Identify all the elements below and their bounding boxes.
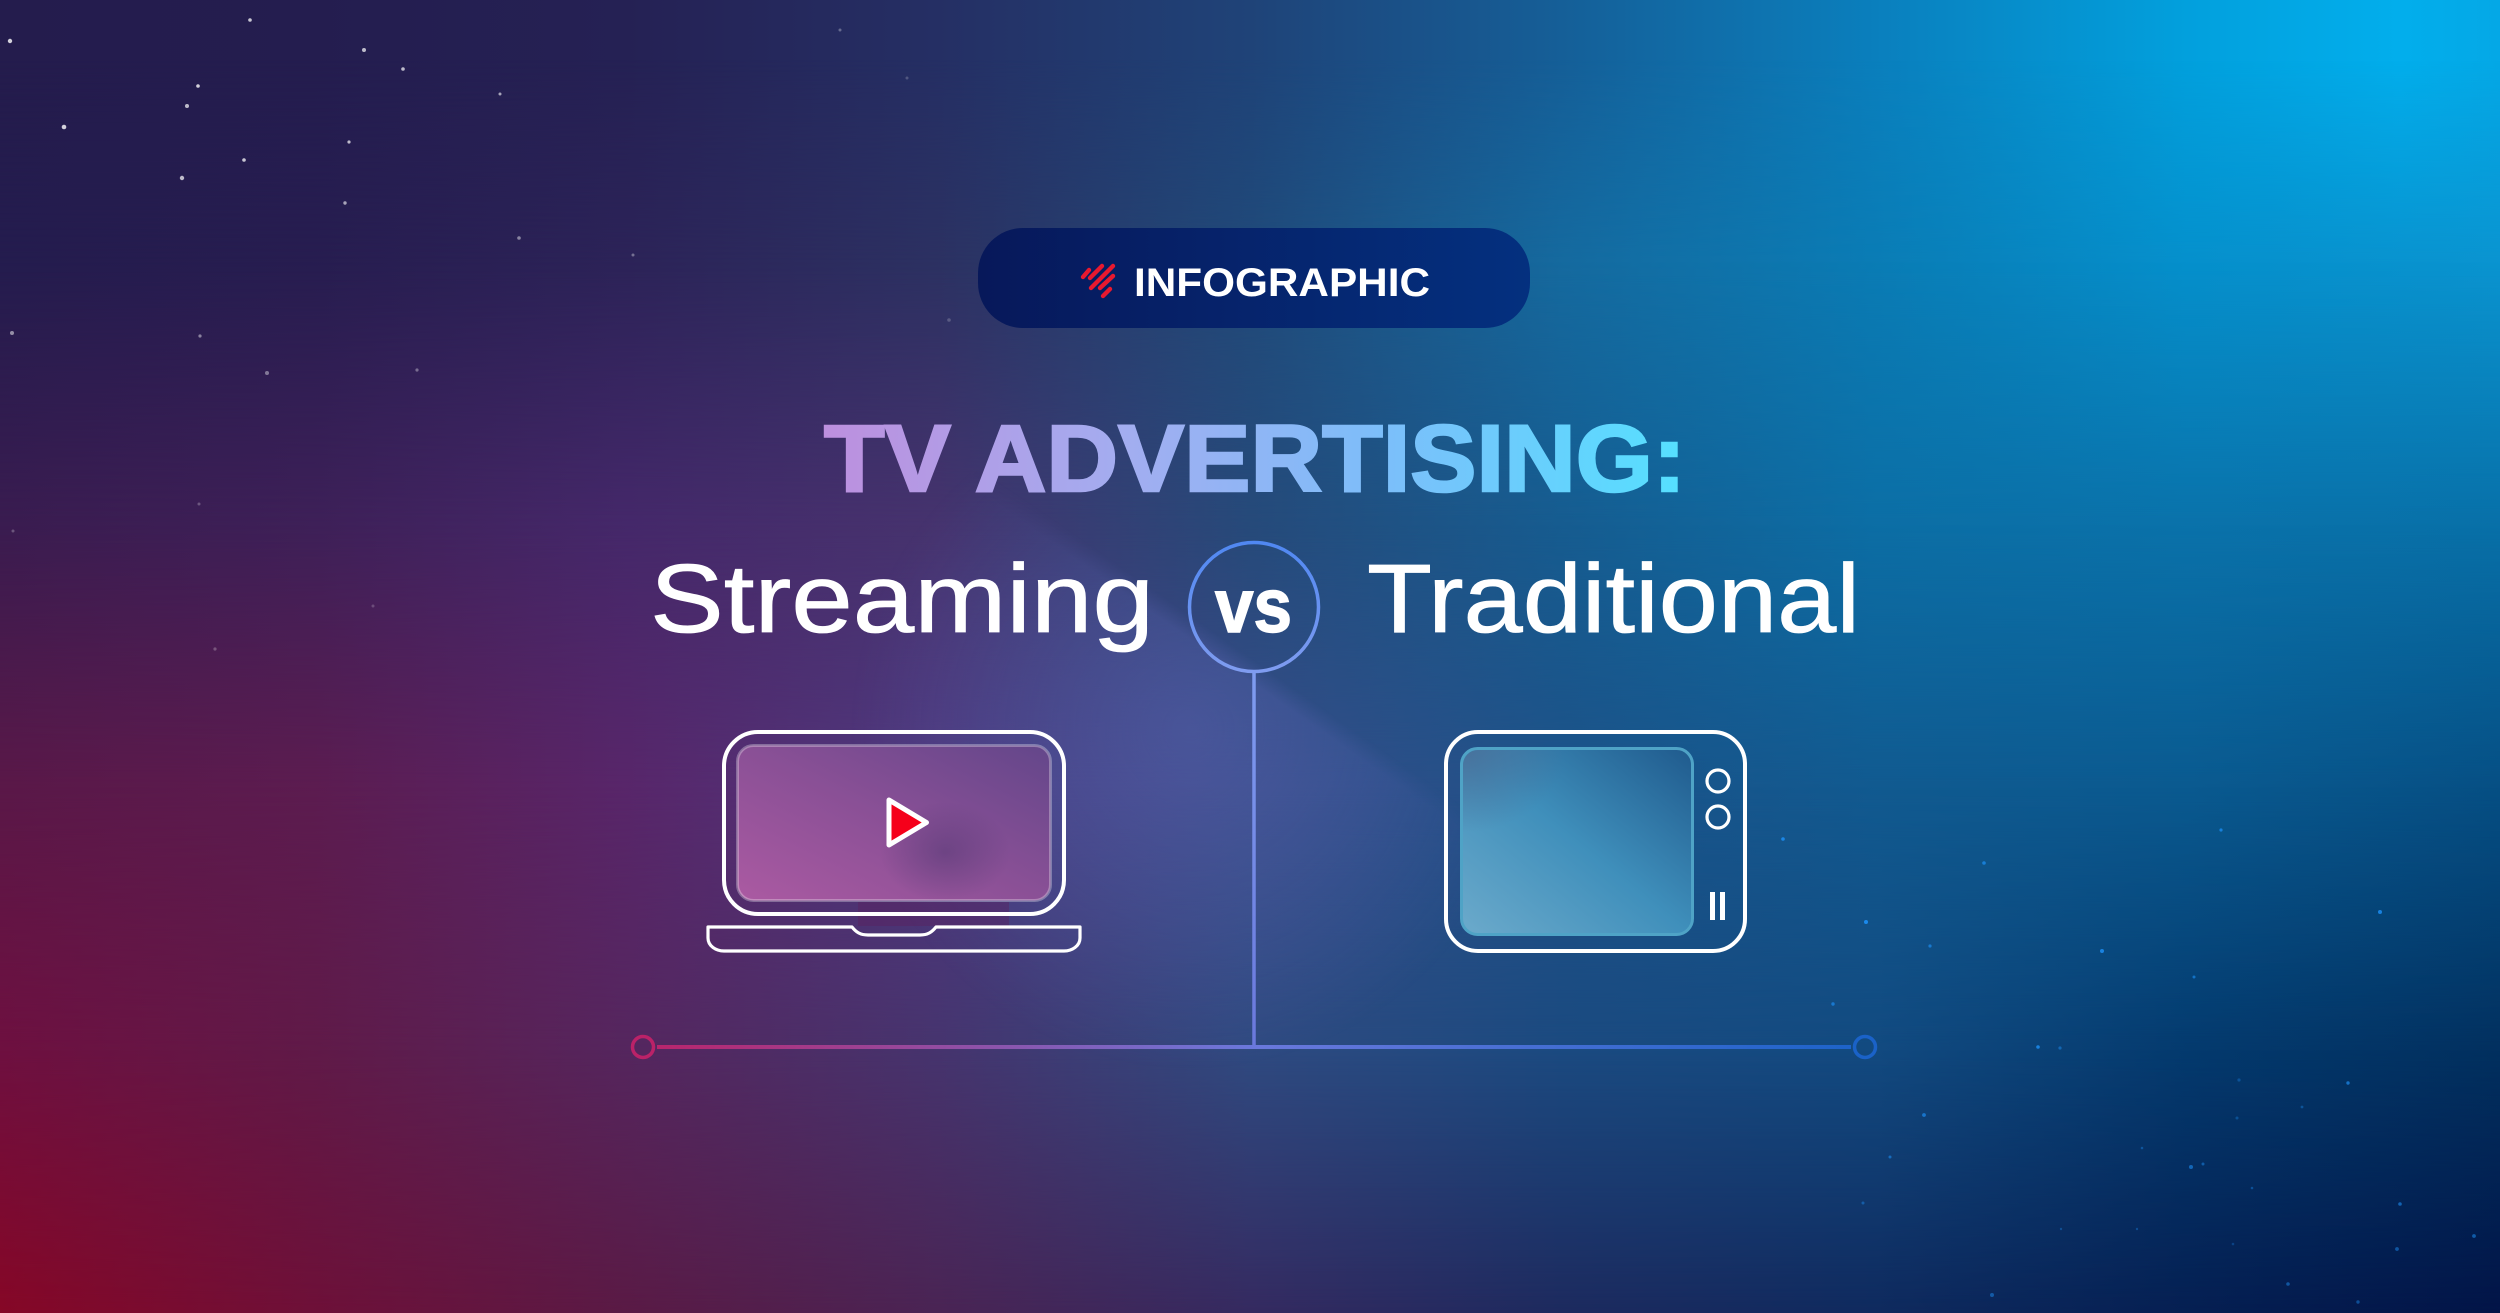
- laptop body outline: [724, 732, 1064, 914]
- tv speaker bars: [1710, 892, 1725, 920]
- tv knobs: [1707, 770, 1729, 828]
- connector: vertical line from vs badge to timeline: [1252, 672, 1256, 1047]
- laptop base: [708, 927, 1080, 951]
- icon: laptop with play button: [708, 732, 1080, 951]
- subtitle: Traditional: Traditional: [1367, 544, 1860, 653]
- title: TV Advertising: TV ADVERTISING:: [824, 406, 1686, 512]
- vs badge: [1190, 542, 1318, 672]
- icon: red diagonal stripes logo: [1083, 266, 1113, 296]
- background stars: blue: [1781, 828, 2476, 1304]
- laptop screen: [738, 746, 1050, 900]
- subtitle: Streaming: Streaming: [650, 544, 1154, 653]
- badge: infographic pill: [978, 228, 1530, 328]
- tv body outline: [1446, 732, 1745, 951]
- timeline: horizontal line with end markers: [632, 1036, 1876, 1058]
- badge: infographic pill: INFOGRAPHIC: [1134, 261, 1430, 305]
- background stars: white: [8, 18, 951, 651]
- vs badge: vs: [1215, 564, 1292, 649]
- tv screen: [1462, 748, 1692, 934]
- icon: television: [1446, 732, 1745, 951]
- play button: [889, 800, 926, 845]
